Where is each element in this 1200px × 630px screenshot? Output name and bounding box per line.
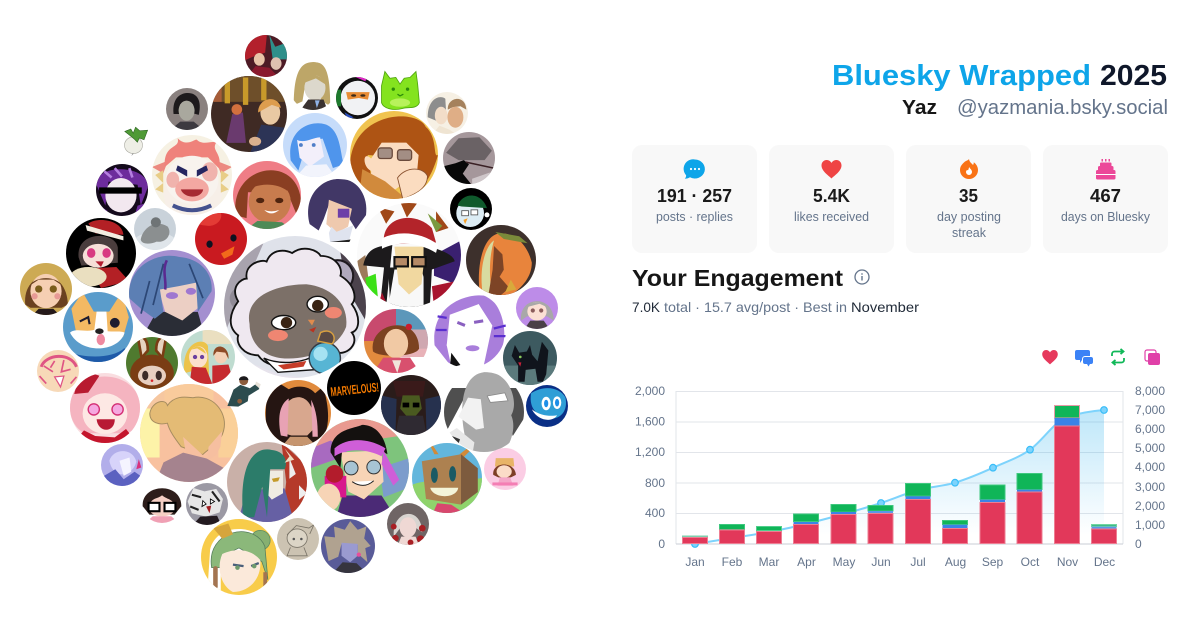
avatar: white turnip (124, 127, 148, 156)
icon: chat bubble (684, 159, 705, 179)
avatar: orange mask on black ring (336, 77, 378, 119)
left axis labels: 0 (658, 537, 665, 551)
month labels: Dec (1094, 555, 1115, 569)
bar: Dec (1092, 524, 1116, 544)
bar: May (831, 504, 856, 544)
avatar: blue toned girl (283, 113, 347, 177)
engagement summary (632, 299, 919, 315)
avatar: red and teal characters (245, 35, 287, 77)
avatar: marvelous logo: MARVELOUS! (330, 379, 380, 399)
month labels: Jul (910, 555, 926, 569)
avatar: pink haired cow (152, 135, 232, 215)
right axis labels: 6,000 (1135, 422, 1165, 436)
month labels: Oct (1021, 555, 1040, 569)
stat card: days on Bluesky (1043, 145, 1168, 253)
right axis labels: 2,000 (1135, 499, 1165, 513)
month labels (685, 555, 1115, 569)
avatar: grey profile woman (444, 372, 524, 452)
month labels: Jan (685, 555, 705, 569)
avatar: purple lineart woman (434, 295, 506, 366)
avatar: pink sketch character (37, 350, 79, 392)
bar: Nov (1054, 406, 1080, 544)
avatar: grey arctic fox (134, 208, 176, 251)
avatar: two men kissing (426, 92, 468, 134)
avatar: auburn hair glasses (350, 111, 438, 199)
avatar: santa man with glasses (357, 203, 461, 307)
avatar: pink chibi girl (484, 448, 526, 490)
icon: likes legend (1042, 350, 1058, 364)
bar: Aug (942, 520, 968, 544)
left axis labels: 1,200 (635, 445, 665, 459)
avatar: long blonde hair girl (294, 62, 330, 110)
avatar: purple glitch character (96, 164, 148, 216)
avatar: pink curly hair girl (70, 373, 141, 443)
avatar: orange haired elf (466, 225, 536, 295)
avatar: grey hair chibi on purple (516, 287, 558, 329)
bar: Jun (868, 506, 893, 544)
avatar: green tophat figure (381, 375, 441, 435)
month labels: Apr (797, 555, 816, 569)
avatar: blue haired person with glasses (129, 250, 215, 336)
avatar: santa chibi on black (66, 218, 136, 288)
left axis labels: 1,600 (635, 414, 665, 428)
right axis labels: 1,000 (1135, 518, 1165, 532)
stat card: posting streak: streak (952, 226, 987, 240)
icon: quotes legend (1145, 350, 1160, 365)
stat card: likes (769, 145, 894, 253)
right axis labels: 8,000 (1135, 384, 1165, 398)
left axis labels: 2,000 (635, 384, 665, 398)
avatar: cardboard box head (412, 443, 482, 513)
icon: replies legend (1075, 350, 1093, 366)
avatar: white hair with roses (387, 503, 429, 545)
avatar: lavender character (101, 444, 143, 486)
title: Bluesky Wrapped (832, 60, 1091, 92)
stat card: likes: likes received (794, 210, 869, 224)
avatar: auburn curly girl (233, 161, 301, 229)
right axis labels: 0 (1135, 537, 1142, 551)
avatar: man in teal suit (227, 376, 261, 407)
left axis labels: 800 (645, 476, 665, 490)
engagement summary: November (851, 299, 919, 315)
monthly stacked bars (682, 406, 1116, 544)
icon: flame (960, 159, 978, 179)
bar: Jul (906, 484, 930, 544)
right axis labels (1135, 384, 1165, 551)
avatar: red plush bird (195, 213, 247, 265)
bar: Feb (720, 524, 744, 544)
avatar: pencil sketch on beige (277, 518, 319, 560)
title: 2025 (1100, 60, 1167, 92)
month labels: May (833, 555, 855, 569)
cumulative line (695, 410, 1104, 544)
avatar: dark hair grey portrait (166, 88, 208, 130)
avatar: purple hair chibi (308, 179, 366, 242)
right axis labels: 4,000 (1135, 460, 1165, 474)
month labels: Mar (759, 555, 779, 569)
avatar: green hair on yellow (201, 519, 277, 595)
bar: Jan (682, 536, 708, 544)
bar: Oct (1017, 474, 1042, 544)
engagement chart (635, 384, 1165, 569)
stat card: likes: 5.4K (813, 186, 850, 206)
stat card: posts and replies: 191 · 257 (657, 186, 732, 206)
user name and handle: @yazmania.bsky.social (957, 97, 1168, 119)
bar: Apr (794, 514, 818, 544)
avatar: black glasses person (142, 488, 182, 523)
avatar: green hair on red (227, 442, 307, 522)
avatar: big sheep with crystal ball (224, 236, 366, 378)
left axis labels: 400 (645, 506, 665, 520)
avatar: pixel corgi (63, 292, 133, 362)
avatar: blonde updo from behind (140, 384, 238, 482)
avatar: green slime (382, 72, 419, 109)
stat card: posts and replies (632, 145, 757, 253)
stat card: days on Bluesky: 467 (1090, 186, 1121, 206)
avatar: black cat (503, 331, 557, 385)
icon: reposts legend (1112, 349, 1124, 365)
icon: birthday cake (1096, 159, 1116, 180)
chart legend (1042, 349, 1160, 366)
avatar cluster (20, 35, 568, 595)
avatar: marvelous logo (327, 361, 381, 415)
month labels: Nov (1057, 555, 1078, 569)
avatar: brown hair girl (20, 263, 72, 315)
avatar: cat hood pink hair man (265, 380, 331, 446)
engagement summary: 7.0K (632, 299, 661, 315)
user name and handle: Yaz (902, 97, 937, 119)
avatar: person on trans flag (364, 309, 428, 373)
stat card: days on Bluesky: days on Bluesky (1061, 210, 1151, 224)
heading: your engagement: Your Engagement (632, 265, 843, 291)
avatar: grey ink sketch (443, 132, 495, 184)
stat card: posting streak: day posting (937, 210, 1001, 224)
line points (692, 407, 1107, 547)
month labels: Jun (871, 555, 891, 569)
stat card: posting streak: 35 (959, 186, 978, 206)
avatar: penguin with santa hat (450, 188, 492, 230)
avatar: glitter headband guy with present (311, 419, 409, 517)
month labels: Sep (982, 555, 1003, 569)
avatar: blue smiling face (526, 385, 568, 427)
right axis labels: 7,000 (1135, 403, 1165, 417)
icon: info (855, 270, 869, 284)
avatar: brown street scene (211, 76, 287, 152)
engagement summary: total · 15.7 avg/post · Best in (664, 299, 847, 315)
avatar: blonde anime girl (181, 330, 235, 384)
month labels: Aug (945, 555, 966, 569)
right axis labels: 5,000 (1135, 441, 1165, 455)
stat card: posts and replies: posts · replies (656, 210, 733, 224)
icon: heart (822, 160, 842, 178)
left axis labels (635, 384, 665, 551)
month labels: Feb (722, 555, 743, 569)
stat card: posting streak (906, 145, 1031, 253)
avatar: brown labubu plush (126, 337, 178, 392)
avatar: purple grey character (321, 519, 375, 573)
bar: Sep (980, 485, 1005, 544)
cumulative area (695, 410, 1104, 544)
bar: Mar (756, 526, 782, 544)
avatar: grey cat sketch (186, 483, 228, 525)
right axis labels: 3,000 (1135, 480, 1165, 494)
